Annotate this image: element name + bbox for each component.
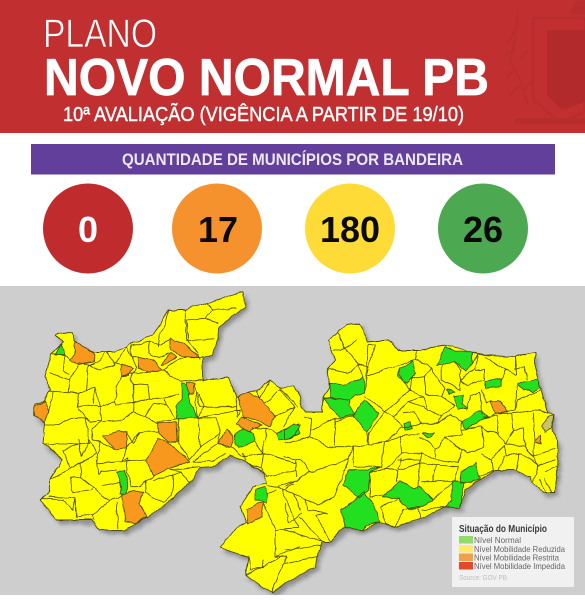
- title: NOVO NORMAL PB: NOVO NORMAL PB: [44, 49, 489, 107]
- counter: green flag: [438, 184, 528, 274]
- legend item: restricted mobility: Nível Mobilidade Restrita: [474, 552, 559, 562]
- panel: quantity heading bar: QUANTIDADE DE MUNICÍPIOS POR BANDEIRA: [122, 150, 463, 169]
- panel: map background: [0, 286, 585, 595]
- title: PLANO: PLANO: [43, 12, 157, 56]
- legend item: reduced mobility: Nível Mobilidade Reduzida: [474, 544, 565, 554]
- counter: orange flag: 17: [198, 209, 238, 250]
- counter: orange flag: [172, 184, 262, 274]
- counter: yellow flag: [305, 184, 395, 274]
- panel: quantity heading bar: [31, 144, 555, 174]
- counter: yellow flag: 180: [320, 209, 380, 250]
- header banner: [0, 0, 585, 133]
- counter: green flag: 26: [463, 209, 503, 250]
- panel: map legend: [452, 517, 574, 587]
- map: eastern municipalities: [285, 333, 557, 563]
- legend source: Source: GOV PB: [459, 573, 507, 582]
- counter: red flag: [43, 184, 133, 274]
- legend item: blocked mobility: Nível Mobilidade Impedida: [474, 561, 565, 571]
- icon: state coat of arms watermark: [505, 0, 585, 122]
- counter: red flag: 0: [78, 209, 98, 250]
- legend title: Situação do Município: [459, 524, 547, 535]
- map: municipalities of Paraíba: [33, 292, 561, 597]
- map: western municipalities: [33, 303, 300, 592]
- subtitle: 10ª AVALIAÇÃO (VIGÊNCIA A PARTIR DE 19/10): [63, 102, 464, 126]
- legend item: normal: Nível Normal: [474, 535, 521, 545]
